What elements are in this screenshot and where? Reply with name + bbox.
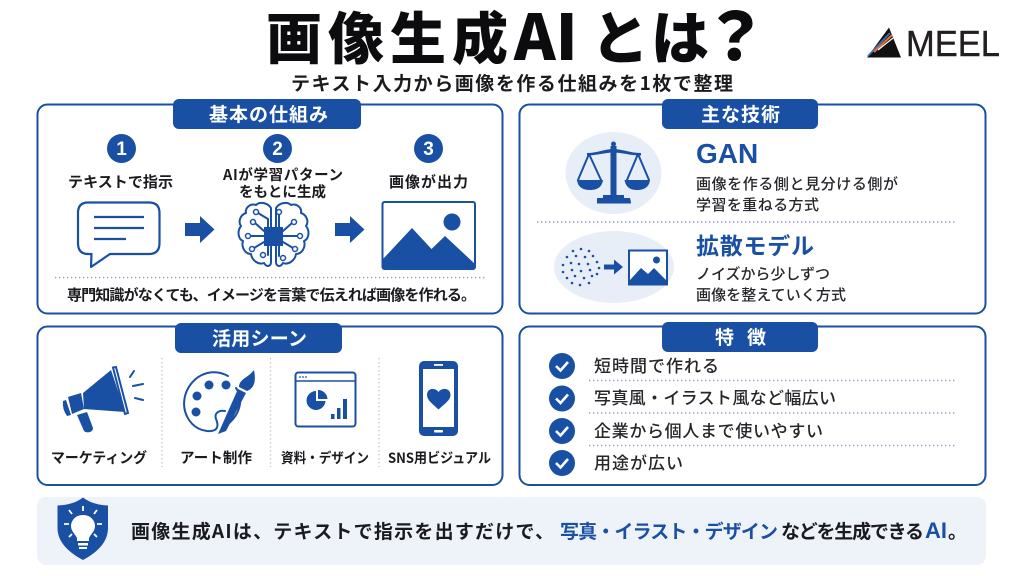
summary text: 画像生成AIは、テキストで指示を出すだけで、 — [131, 517, 554, 544]
step 3 number: 3 — [423, 139, 434, 160]
summary text: などを生成できる — [781, 517, 924, 544]
icon: megaphone — [63, 367, 143, 432]
check item 4: 用途が広い — [594, 449, 683, 474]
check item 2: 写真風・イラスト風など幅広い — [594, 384, 836, 409]
icon: smartphone with heart — [419, 361, 458, 436]
heading: 基本の仕組み — [173, 99, 361, 129]
拡散モデル heading: 拡散モデル — [696, 227, 814, 261]
check item 1 — [549, 352, 719, 379]
heading: 基本の仕組み: 基本の仕組み — [209, 100, 328, 127]
panel: 基本の仕組み — [38, 99, 502, 314]
heading: 特徴: 特徴 — [715, 323, 766, 350]
panel: summary band — [37, 497, 986, 565]
GAN description — [696, 173, 898, 215]
step 2 label — [222, 164, 343, 202]
summary text — [131, 517, 967, 544]
label: SNS用ビジュアル: SNS用ビジュアル — [388, 448, 491, 468]
diffusion description: 画像を整えていく方式 — [696, 284, 846, 305]
icon: scales — [566, 132, 662, 214]
panel: 主な技術 — [520, 99, 986, 314]
step 3 label: 画像が出力 — [389, 171, 468, 192]
diffusion description: ノイズから少しずつ — [696, 263, 830, 284]
heading: 活用シーン: 活用シーン — [212, 324, 307, 351]
icon: brain with chip — [239, 203, 308, 266]
label: アート制作: アート制作 — [180, 447, 252, 468]
check item 3: 企業から個人まで使いやすい — [594, 417, 823, 442]
panel: 活用シーン — [38, 323, 502, 485]
step 2 label: AIが学習パターン — [222, 164, 343, 185]
title — [266, 0, 768, 80]
arrow 1 — [185, 216, 214, 243]
summary text: AI — [925, 518, 947, 543]
heading: 活用シーン — [175, 323, 342, 353]
icon: chart window — [296, 372, 356, 426]
check item 4 — [549, 449, 683, 476]
caption: 専門知識がなくても、イメージを言葉で伝えれば画像を作れる。 — [67, 284, 476, 305]
GAN description: 画像を作る側と見分ける側が — [696, 173, 898, 194]
subtitle: テキスト入力から画像を作る仕組みを1枚で整理 — [291, 69, 733, 96]
icon: palette and brush — [184, 370, 255, 434]
heading: 特徴 — [662, 322, 818, 352]
step 3 number — [414, 134, 443, 163]
icon: speech bubble — [78, 202, 160, 267]
step 2 number — [263, 134, 292, 163]
diffusion description — [696, 263, 846, 305]
step 1 label: テキストで指示 — [68, 171, 173, 192]
icon: image output — [382, 202, 475, 269]
label: マーケティング: マーケティング — [51, 447, 147, 468]
heading: 主な技術: 主な技術 — [701, 100, 780, 127]
GAN description: 学習を重ねる方式 — [696, 194, 819, 215]
summary text: 。 — [948, 517, 967, 544]
panel: 特徴 — [520, 322, 986, 485]
check item 1: 短時間で作れる — [594, 352, 719, 377]
logo: MEEL: MEEL — [906, 23, 1000, 64]
step 1 number — [107, 134, 136, 163]
GAN heading: GAN — [696, 138, 758, 169]
arrow 2 — [335, 216, 364, 243]
logo: MEEL — [867, 23, 1000, 64]
icon: shield with lightbulb — [58, 498, 108, 560]
step 2 label: をもとに生成 — [239, 181, 326, 202]
icon: noise to image — [554, 231, 674, 303]
label: 資料・デザイン: 資料・デザイン — [281, 448, 369, 468]
step 1 number: 1 — [116, 139, 127, 160]
step 2 number: 2 — [272, 139, 283, 160]
summary text: 写真・イラスト・デザイン — [560, 517, 778, 544]
heading: 主な技術 — [662, 99, 818, 129]
